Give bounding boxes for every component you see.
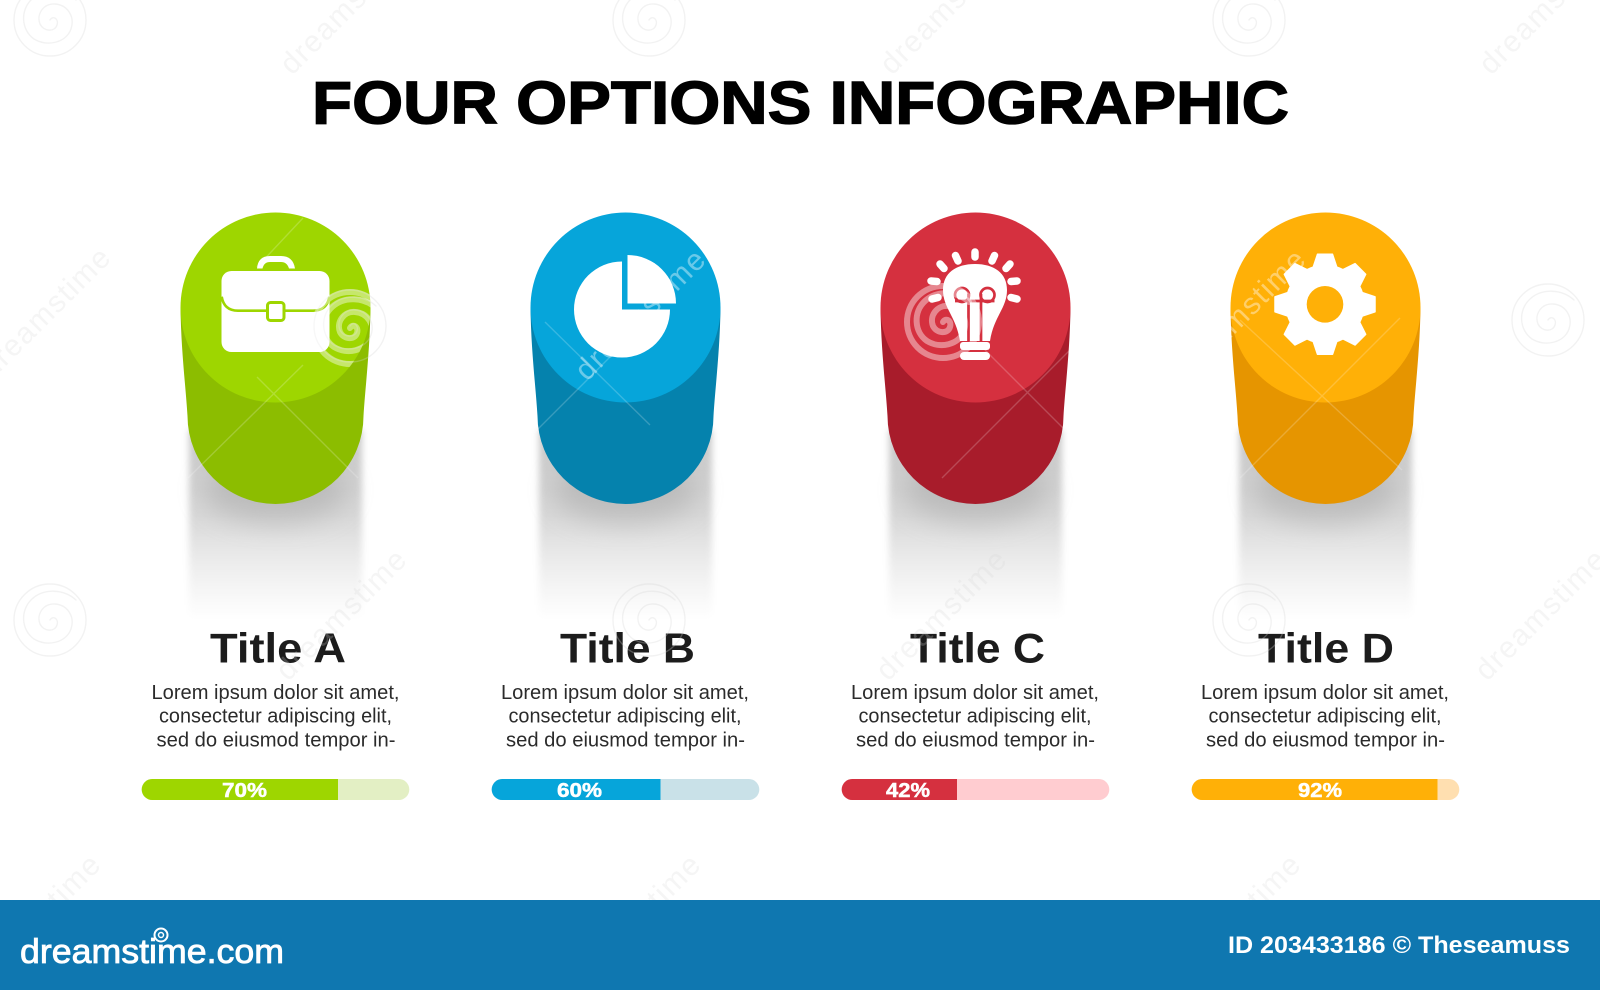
description A: Lorem ipsum dolor sit amet,	[152, 682, 400, 704]
description B: consectetur adipiscing elit,	[508, 706, 742, 728]
watermark overlay: dreamstime	[270, 543, 413, 687]
description C: sed do eiusmod tempor in-	[856, 729, 1095, 751]
title D: Title D	[1258, 624, 1394, 672]
progress bar 92%	[1192, 779, 1459, 802]
progress bar 70%: 70%	[222, 780, 267, 802]
title B: Title B	[560, 624, 695, 672]
cylinder D	[1230, 212, 1420, 504]
description A: sed do eiusmod tempor in-	[156, 729, 396, 751]
description C: Lorem ipsum dolor sit amet,	[851, 682, 1099, 704]
icon: briefcase	[222, 256, 330, 352]
description B: Lorem ipsum dolor sit amet,	[501, 682, 749, 704]
progress bar 60%	[492, 779, 759, 802]
panel: option A	[142, 212, 409, 802]
footer credit: ID 203433186 © Theseamuss	[1228, 932, 1570, 959]
description B	[501, 682, 749, 751]
description B: sed do eiusmod tempor in-	[506, 729, 745, 751]
panel: option D	[1192, 212, 1459, 802]
cylinder C	[880, 212, 1070, 504]
watermark overlay: dreamstime	[1169, 243, 1312, 387]
title: FOUR OPTIONS INFOGRAPHIC	[312, 70, 1289, 136]
shadows under cylinders	[189, 430, 1412, 620]
description A	[152, 682, 400, 751]
icon: gear	[1275, 254, 1375, 354]
watermark overlay: dreamstime	[564, 848, 707, 990]
description C: consectetur adipiscing elit,	[858, 706, 1092, 728]
description C	[851, 682, 1099, 751]
watermark overlay: dreamstime	[569, 243, 712, 387]
progress bar 60%: 60%	[557, 780, 602, 802]
watermark overlay: dreamstime	[1164, 848, 1307, 990]
cylinder A	[180, 212, 370, 504]
progress bar 70%	[142, 779, 409, 802]
footer logo: dreamstime.com	[20, 933, 284, 971]
progress bar 92%: 92%	[1298, 780, 1342, 802]
cylinder B	[530, 212, 720, 504]
description D	[1201, 682, 1449, 751]
progress bar 42%: 42%	[886, 780, 930, 802]
panel: option B	[492, 212, 759, 802]
title C: Title C	[910, 624, 1045, 672]
footer bar	[0, 900, 1600, 990]
icon: light bulb	[931, 252, 1017, 360]
progress bar 42%	[842, 779, 1109, 802]
description A: consectetur adipiscing elit,	[159, 706, 392, 728]
panel: option C	[842, 212, 1109, 802]
watermark overlay: dreamstime	[870, 543, 1013, 687]
description D: Lorem ipsum dolor sit amet,	[1201, 682, 1449, 704]
description D: sed do eiusmod tempor in-	[1206, 729, 1445, 751]
title A: Title A	[210, 624, 346, 672]
description D: consectetur adipiscing elit,	[1208, 706, 1442, 728]
icon: pie chart	[574, 255, 676, 358]
